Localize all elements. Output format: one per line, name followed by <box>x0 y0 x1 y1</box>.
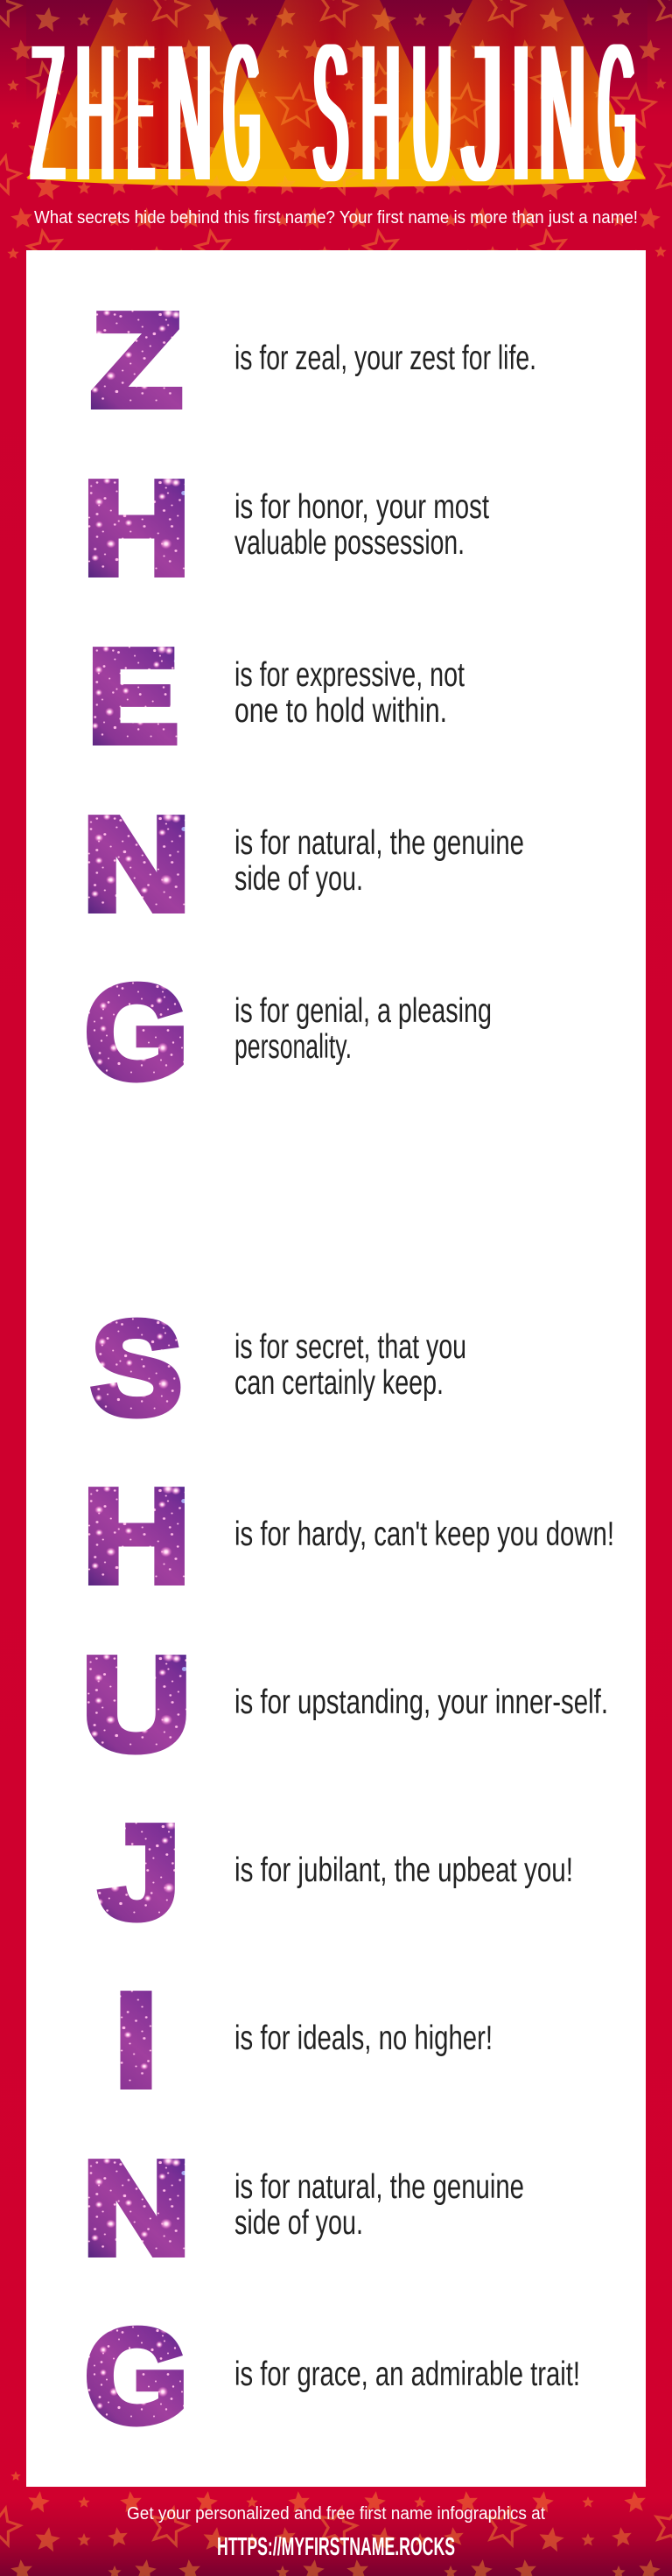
row: J <box>100 1798 573 1946</box>
title: I <box>512 3 530 224</box>
letter J: J <box>100 1798 180 1946</box>
footer url: HTTPS://MYFIRSTNAME.ROCKS <box>217 2533 455 2561</box>
row: I <box>115 1966 493 2114</box>
description G: personality. <box>234 1028 352 1066</box>
row: G <box>85 957 492 1106</box>
row: G <box>85 2301 580 2450</box>
letter E: E <box>88 623 178 770</box>
title: E <box>128 3 153 224</box>
row: U <box>82 1630 608 1778</box>
title: Z <box>32 3 64 224</box>
title: S <box>313 3 347 224</box>
row: H <box>83 1463 614 1610</box>
letter H: H <box>83 455 190 602</box>
description N: is for natural, the genuine <box>234 2168 524 2206</box>
letter Z: Z <box>91 287 182 434</box>
description H <box>234 488 489 562</box>
description I: is for ideals, no higher! <box>234 2020 493 2057</box>
title <box>32 3 635 224</box>
footer text: Get your personalized and free first name infographics at <box>127 2504 545 2524</box>
description E: is for expressive, not <box>234 656 465 694</box>
description N: is for natural, the genuine <box>234 824 524 862</box>
letter G: G <box>85 2301 188 2450</box>
row: N <box>82 791 524 938</box>
letter G: G <box>85 957 188 1106</box>
title: H <box>77 3 115 224</box>
row: S <box>91 1295 466 1442</box>
row: E <box>88 623 465 770</box>
description S: can certainly keep. <box>234 1364 444 1402</box>
title: N <box>167 3 212 224</box>
row: Z <box>91 287 536 434</box>
description Z: is for zeal, your zest for life. <box>234 340 536 377</box>
description H: valuable possession. <box>234 524 465 562</box>
title: H <box>362 3 400 224</box>
title: G <box>224 3 260 224</box>
description N <box>234 824 524 898</box>
description S <box>234 1328 466 1402</box>
letter I: I <box>115 1966 158 2114</box>
description S: is for secret, that you <box>234 1328 466 1366</box>
letter N: N <box>82 791 191 938</box>
row: H <box>83 455 489 602</box>
description G: is for genial, a pleasing <box>234 992 492 1030</box>
letter H: H <box>83 1463 190 1610</box>
description E: one to hold within. <box>234 692 447 730</box>
description N: side of you. <box>234 860 363 898</box>
subtitle: What secrets hide behind this first name? Your first name is more than just a name! <box>34 208 638 228</box>
title: U <box>413 3 452 224</box>
title: J <box>462 3 502 224</box>
description N <box>234 2168 524 2242</box>
description N: side of you. <box>234 2204 363 2242</box>
letter N: N <box>82 2135 191 2282</box>
description H: is for honor, your most <box>234 488 489 526</box>
description J: is for jubilant, the upbeat you! <box>234 1852 573 1889</box>
spotlights <box>26 0 648 187</box>
letter S: S <box>91 1295 182 1442</box>
description E <box>234 656 465 730</box>
letter U: U <box>82 1630 191 1778</box>
row: N <box>82 2135 524 2282</box>
description G <box>234 992 492 1066</box>
